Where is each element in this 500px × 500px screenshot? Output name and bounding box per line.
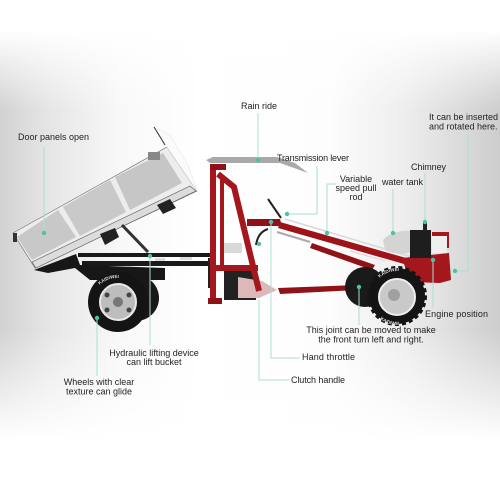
illustration: chassis and rear wheels [34, 224, 210, 332]
illustration: dump bed [13, 127, 197, 268]
label: joint: the front turn left and right. [318, 334, 424, 344]
label: wheels with clear texture: texture can glide [66, 386, 132, 396]
illustration: steering handle [277, 219, 422, 270]
label: variable speed pull rod: speed pull [335, 183, 377, 193]
label: variable speed pull rod: rod [349, 192, 363, 202]
illustration: engine and front wheels: KAIDIWEI [380, 316, 400, 325]
label: door panels open: Door panels open [18, 132, 89, 142]
illustration: engine and front wheels: KAIDIWEI [378, 268, 399, 278]
label: rain ride: Rain ride [241, 101, 277, 111]
marker dots [42, 158, 457, 320]
label: water tank: water tank [381, 177, 424, 187]
label: wheels with clear texture: Wheels with clear [64, 377, 134, 387]
label: inserted and rotated: and rotated here. [429, 122, 498, 132]
label: engine position: Engine position [425, 309, 488, 319]
label: joint: This joint can be moved to make [306, 325, 436, 335]
label: hydraulic lifting device: can lift bucket [126, 357, 182, 367]
label: chimney: Chimney [411, 162, 446, 172]
label: hand throttle: Hand throttle [302, 352, 355, 362]
label: variable speed pull rod: Variable [340, 174, 372, 184]
illustration: engine and front wheels [345, 223, 451, 326]
label: transmission lever: Transmission lever [277, 153, 349, 163]
illustration: chassis and rear wheels: KAIDIWEI [98, 274, 119, 285]
label: inserted and rotated: It can be inserted [429, 112, 498, 122]
leader lines [44, 113, 468, 380]
label: hydraulic lifting device: Hydraulic lifting device [109, 348, 199, 358]
label: clutch handle: Clutch handle [291, 375, 345, 385]
illustration: canopy and red frame [206, 157, 357, 304]
